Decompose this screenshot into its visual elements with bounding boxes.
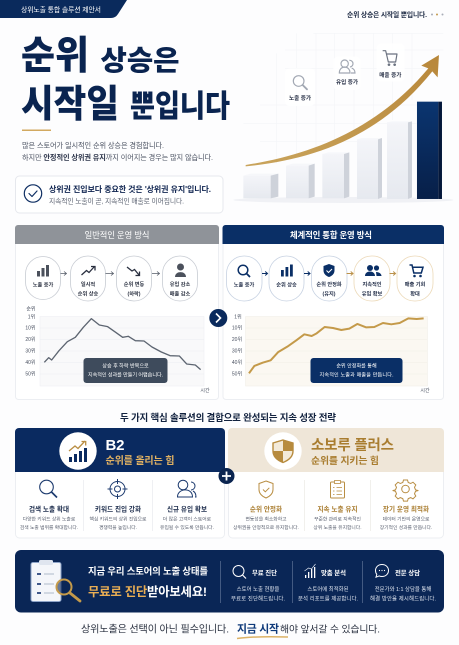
card: visitors increase bbox=[333, 57, 361, 90]
CTA text: 무료로 진단받아보세요! bbox=[88, 585, 207, 599]
card: visitors increase: 유입 증가 bbox=[336, 78, 358, 86]
hero chart illustration bbox=[233, 33, 453, 203]
panel: systematic operation bbox=[222, 225, 444, 400]
feature: keyword entry: 경쟁력을 높입니다. bbox=[99, 524, 137, 531]
card: exposure increase bbox=[285, 68, 315, 106]
title: 순위 bbox=[21, 35, 89, 78]
panel header bbox=[15, 225, 219, 244]
card header bbox=[228, 428, 444, 472]
title: 시작일 bbox=[21, 84, 119, 126]
service: expert consultation bbox=[370, 564, 436, 602]
feature: long-term optimization: 데이터 기반의 운영으로 bbox=[383, 516, 430, 522]
line chart: rank stable: 20위 bbox=[232, 336, 242, 343]
intro text bbox=[22, 141, 213, 162]
process flow: 순위 상승 bbox=[78, 290, 98, 298]
feature: new visitors: 더 많은 고객이 스토어로 bbox=[163, 516, 212, 522]
feature: search exposure bbox=[20, 480, 78, 531]
title: 상승은 bbox=[100, 45, 180, 76]
feature: new visitors bbox=[160, 480, 214, 531]
card: sales increase: 매출 증가 bbox=[379, 71, 401, 79]
process flow: (하락) bbox=[128, 290, 141, 298]
closing statement: 상위노출은 선택이 아닌 필수입니다. bbox=[81, 622, 229, 636]
header tab: 상위노출 통합 솔루션 제안서 bbox=[21, 5, 101, 14]
chart note bbox=[310, 358, 402, 383]
chart note: 순위 안정화를 통해 bbox=[336, 362, 377, 370]
chart note: 지속적인 노출과 매출을 만듭니다. bbox=[320, 372, 394, 378]
closing statement bbox=[81, 622, 380, 638]
service: free diagnosis: 무료로 진단해드립니다. bbox=[231, 594, 285, 602]
feature: rank stability bbox=[233, 481, 299, 531]
process flow: 확대 bbox=[410, 290, 420, 298]
process flow: (유지) bbox=[322, 290, 336, 298]
panel header: 체계적인 통합 운영 방식 bbox=[290, 230, 372, 240]
feature: keyword entry: 핵심 키워드의 상위 진입으로 bbox=[90, 516, 147, 522]
process flow bbox=[26, 256, 198, 301]
top-right tagline: 순위 상승은 시작일 뿐입니다. bbox=[347, 10, 427, 19]
card header: 순위를 올리는 힘 bbox=[106, 454, 174, 467]
chart note: 상승 후 하락 반복으로 bbox=[102, 362, 149, 370]
feature: new visitors: 신규 유입 확보 bbox=[167, 504, 207, 514]
service: expert consultation: 전문 상담 bbox=[395, 568, 420, 577]
intro text: 많은 스토어가 일시적인 순위 상승은 경험합니다. bbox=[22, 141, 164, 150]
section heading: 두 가지 핵심 솔루션의 결합으로 완성되는 지속 성장 전략 bbox=[120, 412, 336, 424]
service: custom analysis: 맞춤 분석 bbox=[321, 568, 346, 577]
service: free diagnosis: 무료 진단 bbox=[252, 568, 277, 577]
gold title rule bbox=[22, 130, 51, 131]
growth arrow bbox=[246, 55, 439, 166]
bars bbox=[243, 102, 442, 199]
feature: rank stability: 상위권을 안정적으로 유지합니다. bbox=[233, 524, 299, 531]
feature: sustained exposure: 꾸준한 관리로 지속적인 bbox=[314, 516, 361, 522]
feature: sustained exposure: 상위 노출을 유지합니다. bbox=[313, 524, 362, 531]
CTA text bbox=[88, 566, 208, 599]
icon: clipboard with magnifier bbox=[31, 560, 80, 602]
panel header: 일반적인 운영 방식 bbox=[84, 230, 150, 240]
service: free diagnosis bbox=[231, 566, 285, 602]
icon: next arrow button bbox=[209, 309, 227, 327]
line chart: rank stable bbox=[232, 313, 430, 394]
card header: 소보루 플러스 bbox=[311, 437, 394, 454]
closing statement: 해야 앞서갈 수 있습니다. bbox=[280, 622, 380, 636]
feature: sustained exposure: 지속 노출 유지 bbox=[317, 504, 358, 514]
service: custom analysis: 스토어에 최적화된 bbox=[307, 585, 349, 593]
process flow: 매출 기회 bbox=[405, 280, 425, 288]
feature: keyword entry: 키워드 진입 강화 bbox=[95, 504, 141, 514]
line chart: rank falling: 40위 bbox=[25, 359, 36, 366]
process flow: 순위 상승 bbox=[276, 280, 297, 288]
line chart: rank falling: 10위 bbox=[25, 325, 36, 332]
title: 뿐입니다 bbox=[130, 89, 230, 124]
line chart: rank falling: 20위 bbox=[25, 336, 36, 343]
service: expert consultation: 전문가와 1:1 상담을 통해 bbox=[375, 585, 431, 593]
title bbox=[21, 35, 230, 126]
service: custom analysis: 분석 리포트를 제공합니다. bbox=[298, 594, 358, 602]
card: sales increase bbox=[377, 43, 405, 82]
card: Soboru Plus bbox=[228, 428, 444, 538]
panel header bbox=[222, 225, 444, 244]
feature: search exposure: 다양한 키워드 상위 노출로 bbox=[23, 516, 76, 522]
call to action banner bbox=[15, 550, 444, 612]
CTA text: 지금 우리 스토어의 노출 상태를 bbox=[88, 566, 208, 576]
process flow bbox=[226, 256, 433, 301]
callout: key message: 상위권 진입보다 중요한 것은 '상위권 유지'입니다. bbox=[49, 184, 211, 194]
service: expert consultation: 해결 방안을 제시해드립니다. bbox=[370, 594, 436, 602]
feature: search exposure: 검색 노출 범위를 확대합니다. bbox=[20, 524, 78, 531]
floor shadow bbox=[233, 197, 453, 203]
feature: keyword entry bbox=[90, 479, 147, 531]
process flow: 매출 감소 bbox=[170, 290, 190, 298]
process flow: 노출 증가 bbox=[33, 280, 53, 288]
icon: check circle bbox=[24, 185, 42, 202]
feature: new visitors: 유입될 수 있도록 만듭니다. bbox=[160, 524, 214, 531]
card header: 순위를 지키는 힘 bbox=[311, 454, 379, 467]
line chart: rank stable: 10위 bbox=[232, 325, 242, 332]
process flow: 일시적 bbox=[81, 280, 95, 288]
callout: key message: 지속적인 노출이 곧, 지속적인 매출로 이어집니다. bbox=[49, 196, 184, 206]
header tab bbox=[0, 0, 127, 18]
chart note: 지속적인 성과를 만들기 어렵습니다. bbox=[88, 372, 163, 378]
card header: B2 bbox=[106, 437, 124, 454]
line chart: rank falling: 순위 bbox=[26, 306, 36, 312]
line chart: rank falling: 1위 bbox=[28, 313, 35, 320]
line chart: rank stable: 30위 bbox=[232, 348, 242, 355]
process flow: 노출 증가 bbox=[234, 280, 254, 288]
line chart: rank falling bbox=[25, 306, 210, 394]
line chart: rank stable: 시간 bbox=[420, 387, 430, 394]
callout: key message bbox=[16, 176, 223, 213]
process flow: 유입 감소 bbox=[170, 280, 190, 288]
service: custom analysis bbox=[298, 564, 358, 602]
line chart: rank falling: 시간 bbox=[200, 387, 210, 394]
feature: long-term optimization: 장기 운영 최적화 bbox=[383, 504, 429, 514]
feature: search exposure: 검색 노출 확대 bbox=[29, 504, 69, 514]
line chart: rank stable: 1위 bbox=[234, 313, 242, 320]
line chart: rank falling: 30위 bbox=[25, 348, 36, 355]
card: exposure increase: 노출 증가 bbox=[289, 94, 311, 102]
faint grid bbox=[243, 33, 443, 163]
process flow: 지속적인 bbox=[362, 280, 382, 288]
icon: plus badge bbox=[218, 468, 234, 484]
top-right tagline bbox=[347, 10, 444, 19]
closing statement: 지금 시작 bbox=[237, 622, 279, 636]
panel: typical operation bbox=[15, 225, 219, 400]
line chart: rank stable: 50위 bbox=[232, 370, 242, 378]
card header bbox=[15, 428, 225, 472]
feature: rank stability: 변동성을 최소화하고 bbox=[245, 516, 287, 522]
line chart: rank falling: 50위 bbox=[25, 370, 36, 378]
line chart: rank stable: 40위 bbox=[232, 359, 242, 366]
card: B2 bbox=[15, 428, 225, 538]
service: free diagnosis: 스토어 노출 현황을 bbox=[237, 585, 279, 593]
feature: rank stability: 순위 안정화 bbox=[250, 504, 282, 514]
process flow: 순위 변동 bbox=[124, 280, 144, 288]
feature: sustained exposure bbox=[313, 480, 362, 531]
feature: long-term optimization: 장기적인 성과를 만듭니다. bbox=[380, 524, 432, 531]
process flow: 순위 안정화 bbox=[316, 280, 342, 288]
feature: long-term optimization bbox=[380, 480, 432, 531]
intro text: 하지만 안정적인 상위권 유지까지 이어지는 경우는 많지 않습니다. bbox=[22, 153, 213, 162]
chart note bbox=[84, 358, 168, 383]
process flow: 유입 확보 bbox=[362, 290, 382, 298]
